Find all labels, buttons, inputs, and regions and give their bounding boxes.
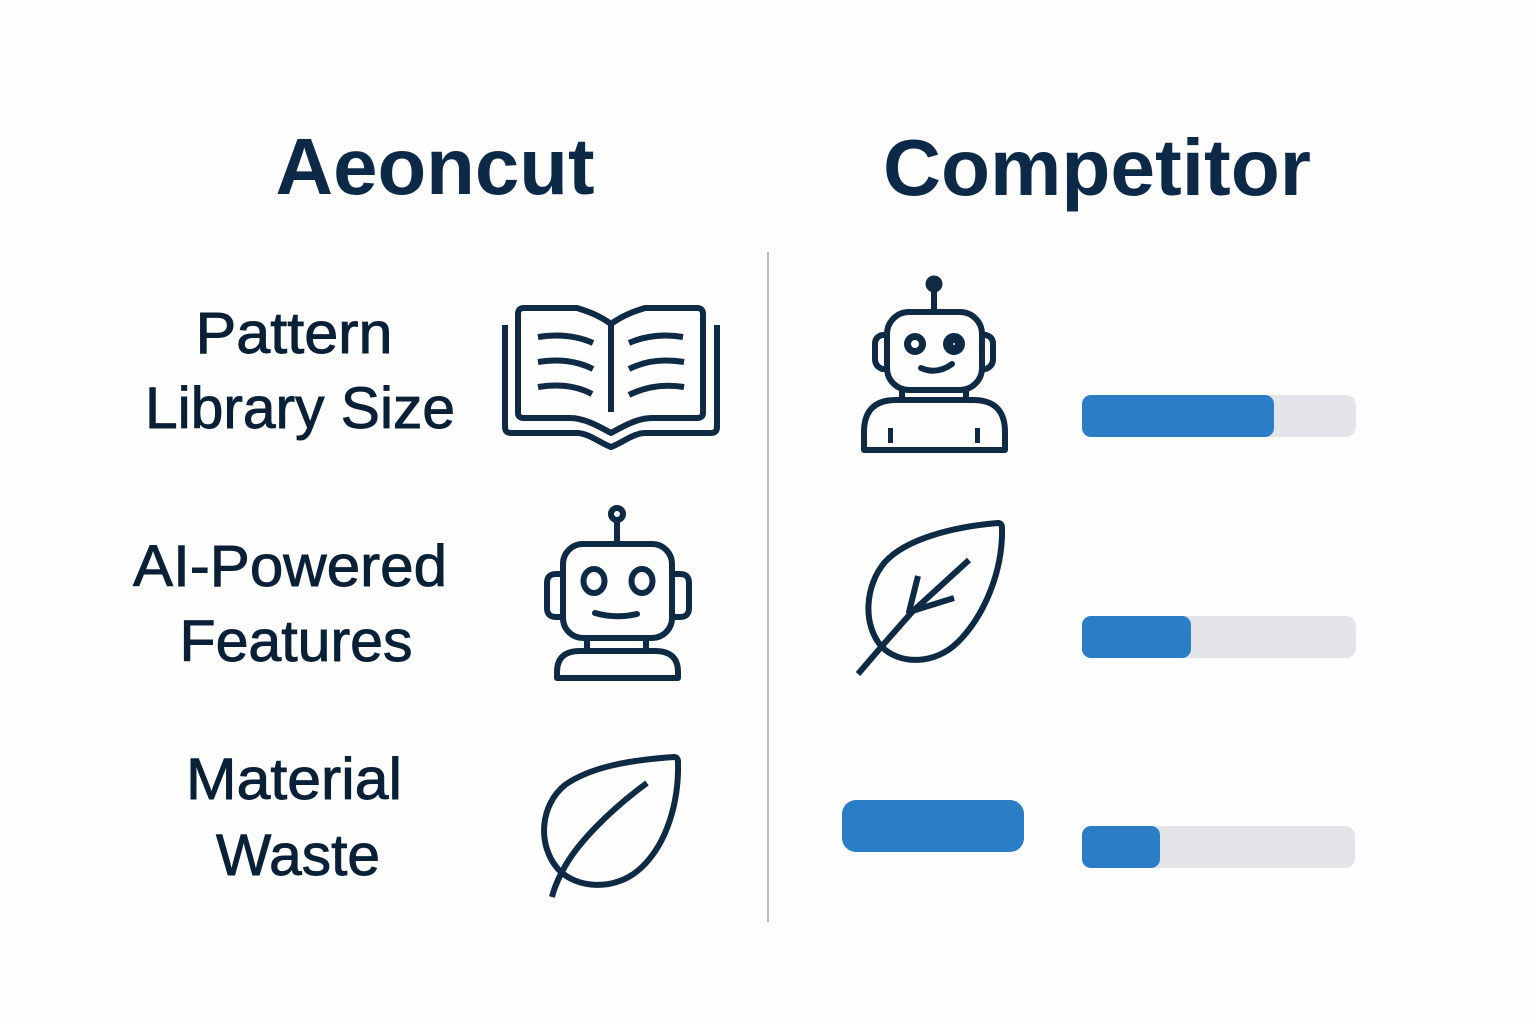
bar: pattern library, Competitor	[1082, 395, 1356, 437]
icon: leaf, Competitor	[858, 523, 1002, 674]
bar: AI features, Competitor	[1082, 616, 1356, 658]
label: Pattern Library Size: Pattern	[196, 301, 392, 366]
label: AI-Powered Features	[133, 534, 447, 674]
icon: leaf, Aeoncut	[544, 757, 678, 897]
center divider	[767, 252, 769, 922]
icon: open book	[505, 308, 717, 447]
label: Material Waste: Waste	[216, 823, 380, 888]
heading: Competitor: Competitor	[883, 123, 1311, 212]
bar: material waste, Competitor	[1082, 826, 1355, 868]
label: AI-Powered Features: AI-Powered	[133, 534, 447, 599]
antenna dot	[926, 276, 942, 292]
label: AI-Powered Features: Features	[180, 609, 412, 674]
label: Pattern Library Size: Library Size	[145, 376, 455, 441]
label: Material Waste	[186, 747, 402, 888]
icon: robot, Competitor	[864, 276, 1005, 450]
icon: robot, Aeoncut	[547, 508, 689, 678]
blue pill	[842, 800, 1024, 852]
label: Material Waste: Material	[186, 747, 402, 812]
label: Pattern Library Size	[145, 301, 455, 441]
heading: Aeoncut: Aeoncut	[276, 122, 594, 211]
